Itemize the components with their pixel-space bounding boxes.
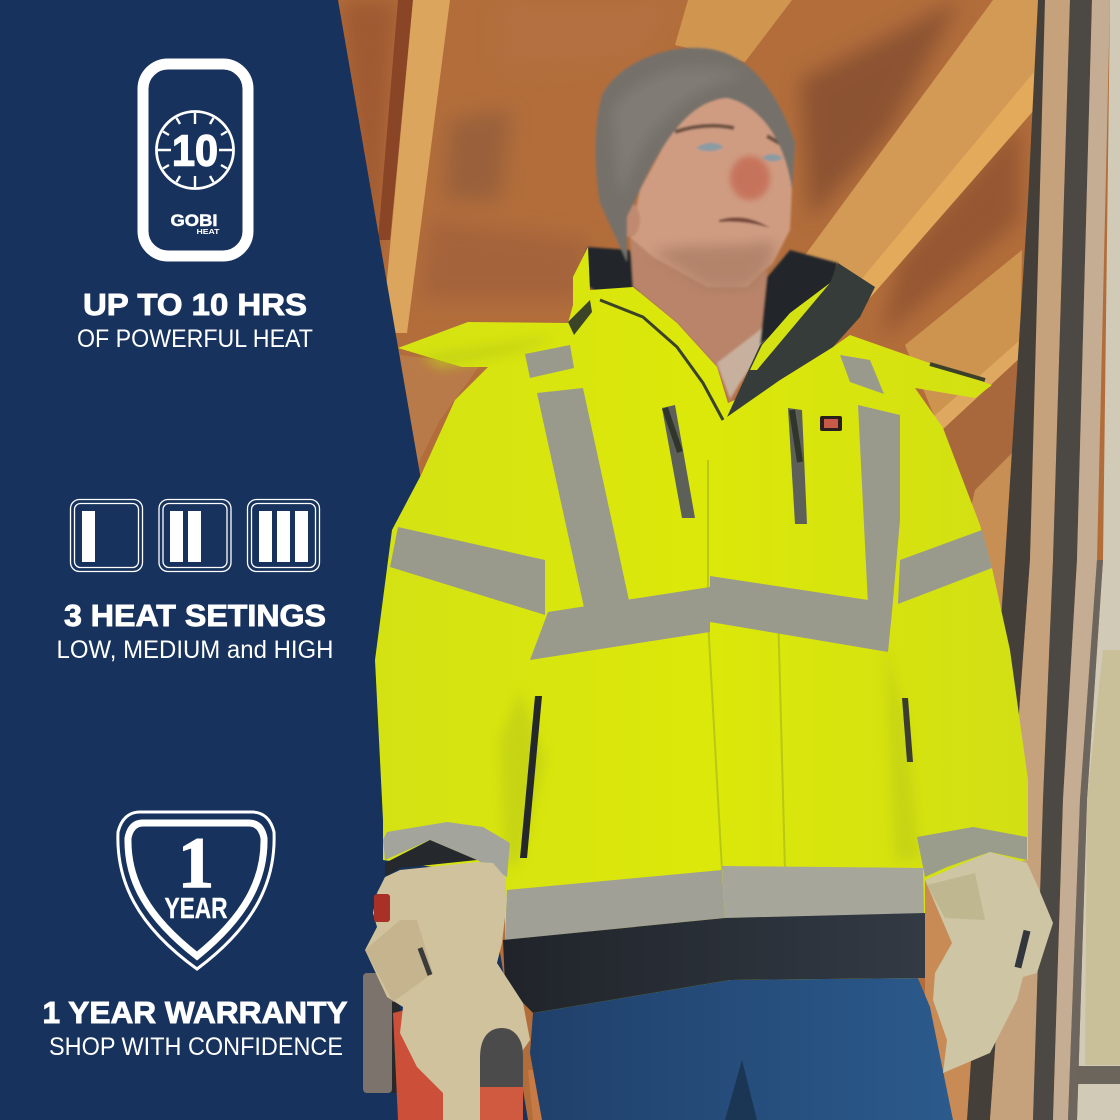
glove left pad — [365, 920, 433, 1002]
clock number: 10 — [172, 126, 218, 176]
door frame post two — [1033, 0, 1092, 1120]
window beige — [1077, 0, 1120, 1120]
icon: level bars — [82, 511, 308, 562]
door frame light stripe — [1053, 0, 1110, 1120]
wood beam right large — [805, 0, 1040, 300]
heat button — [820, 416, 842, 431]
shield number: 1 — [178, 823, 214, 903]
subheading: low medium high: LOW, MEDIUM and HIGH — [56, 636, 334, 664]
shield label: YEAR — [164, 893, 228, 925]
drill body — [392, 1000, 400, 1093]
collar seam — [600, 300, 723, 420]
wood beam right lower — [905, 250, 1022, 430]
red glove tag — [374, 894, 390, 922]
sleeve tape left — [390, 527, 545, 615]
drill battery — [363, 973, 392, 1093]
nose — [730, 156, 770, 200]
icon: 1 year warranty shield — [118, 812, 274, 969]
collar right dark — [727, 263, 875, 417]
left shoulder tape — [525, 345, 574, 378]
clock dial — [156, 112, 234, 188]
reflective bands — [383, 345, 1027, 940]
plywood right lower — [925, 358, 1020, 600]
glove right cuff fold — [927, 873, 985, 920]
shirt collar — [717, 297, 787, 398]
eyes — [696, 143, 783, 162]
dark hood lining left — [577, 247, 640, 300]
collar yellow strip — [750, 283, 830, 370]
cuff tape right — [917, 827, 1027, 877]
icons: three heat levels — [70, 500, 320, 572]
subheading: of powerful heat: OF POWERFUL HEAT — [77, 325, 313, 353]
lower zippers — [520, 696, 542, 858]
jeans — [530, 976, 953, 1120]
wood beam top — [675, 0, 792, 62]
head — [577, 48, 838, 403]
hem tape — [505, 870, 725, 940]
vertical tape right — [858, 405, 900, 612]
drill handle — [480, 1028, 523, 1120]
eyebrows — [675, 126, 788, 148]
placket seams — [708, 460, 800, 977]
glove left — [365, 862, 530, 1120]
brand logo: GOBI — [170, 211, 218, 230]
vertical tape left — [537, 388, 630, 612]
sleeve tape right — [898, 530, 992, 604]
heading: 3 heat setings: 3 HEAT SETINGS — [64, 598, 326, 633]
icon: battery with 10 hour clock: HEAT — [196, 227, 220, 236]
wood lower right — [925, 600, 1020, 1120]
heading: 1 year warranty: 1 YEAR WARRANTY — [42, 995, 348, 1030]
neck — [630, 237, 767, 403]
stubble — [652, 240, 775, 290]
glove right zipper — [1014, 930, 1030, 968]
door frame wood stripe — [990, 0, 1070, 1120]
jacket shading — [420, 335, 920, 870]
plywood mottling — [340, 0, 1020, 340]
chest pockets — [662, 405, 695, 518]
jeans gap — [725, 1060, 757, 1120]
flap marks right — [930, 364, 985, 380]
photo: worker in hi-vis jacket — [363, 48, 1053, 1120]
beanie — [596, 48, 795, 262]
wood post left dark — [378, 0, 413, 240]
icon: battery with 10 hour clock — [143, 64, 248, 256]
plywood under flap — [400, 355, 480, 470]
jacket body — [375, 247, 1028, 1013]
hood right lining — [760, 250, 838, 345]
hem dark band — [503, 913, 925, 1013]
door frame thin line — [1068, 560, 1103, 1120]
icon: level frames — [70, 500, 320, 572]
window lower tone — [1085, 650, 1120, 1065]
wood sliver by jeans — [528, 1070, 545, 1120]
face — [630, 96, 792, 287]
beanie tone — [612, 68, 745, 195]
door frame post one — [967, 0, 1045, 1120]
glove left strap — [420, 948, 430, 975]
window band — [1077, 1066, 1120, 1084]
glove right — [925, 852, 1053, 1073]
mouth — [719, 217, 770, 228]
chest tape — [530, 587, 710, 660]
dark wrist — [385, 840, 477, 877]
wood beam left — [382, 0, 450, 333]
flap strap left — [568, 300, 592, 335]
subheading: shop with confidence: SHOP WITH CONFIDENCE — [49, 1033, 343, 1061]
heading: up to 10 hrs: UP TO 10 HRS — [83, 287, 307, 322]
ear — [620, 203, 640, 237]
photo: construction site background — [330, 0, 1120, 1120]
zipper pulls — [665, 408, 800, 462]
panel: navy sidebar — [0, 0, 528, 1120]
cuff tape left — [383, 822, 510, 877]
